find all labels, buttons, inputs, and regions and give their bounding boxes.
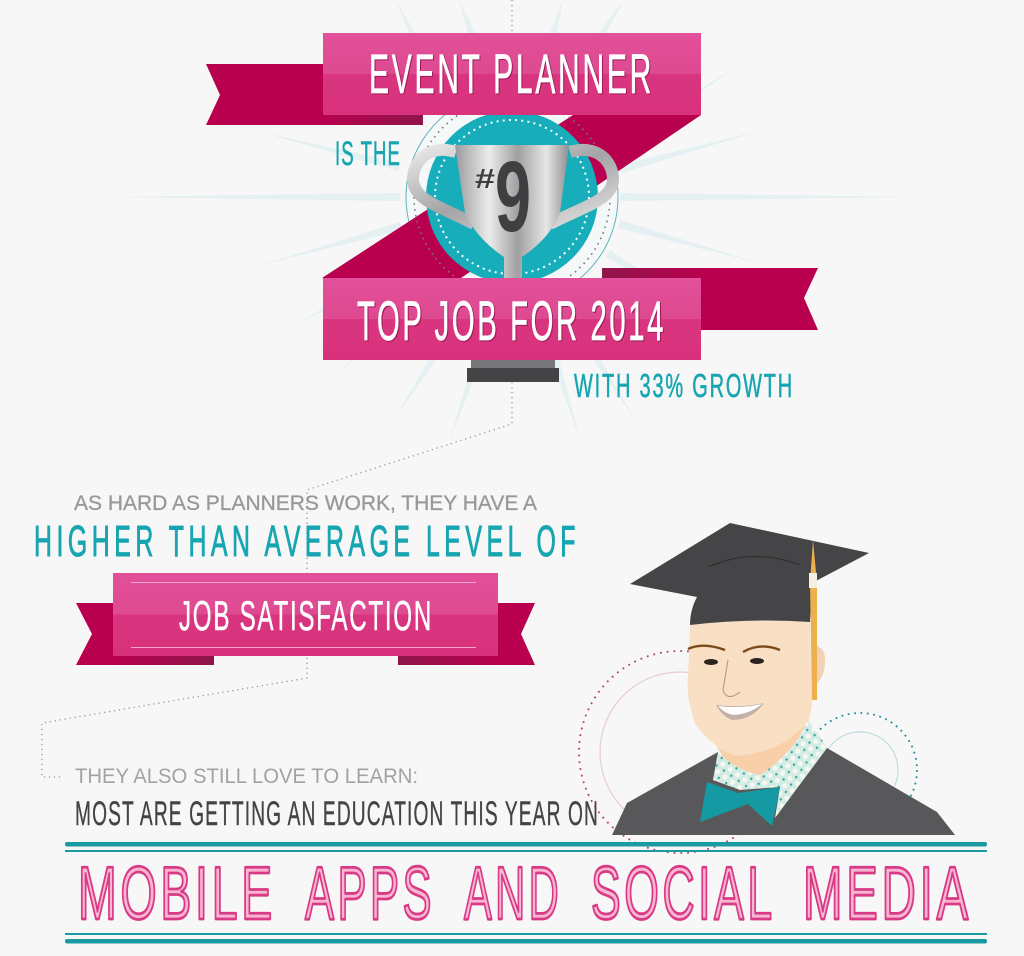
heading: TOP JOB FOR 2014: [357, 289, 666, 352]
headline: mobile apps and social media: MOBILE: [78, 851, 276, 935]
headline: mobile apps and social media: AND: [464, 851, 562, 935]
neck: [716, 722, 806, 795]
bottom rule: [131, 647, 476, 648]
cap arc: [708, 556, 800, 567]
headline: mobile apps and social media: SOCIAL: [591, 851, 774, 935]
sunburst rays: [110, 0, 917, 440]
trophy number: #: [475, 163, 496, 194]
label: JOB SATISFACTION: [179, 592, 433, 639]
ribbon tail: [206, 64, 423, 125]
eyebrows: [688, 646, 780, 652]
trophy handles: [413, 150, 613, 224]
headline: mobile apps and social media: APPS: [305, 851, 435, 935]
eye right: [750, 658, 764, 664]
text: as hard as planners work: AS HARD AS PLANNERS WORK, THEY HAVE A: [74, 492, 537, 515]
teal dotted circle: [803, 713, 917, 827]
tassel: [810, 540, 817, 700]
dotted connector line: [42, 0, 512, 777]
teeth: [718, 704, 762, 715]
heading: EVENT PLANNER: [369, 42, 654, 105]
left fold: [113, 656, 214, 665]
ribbon tail: [602, 268, 818, 330]
ribbon: event planner: [206, 33, 701, 125]
text: higher than average level of: HIGHER THAN AVERAGE LEVEL OF: [34, 517, 580, 566]
pink thin circle: [600, 672, 760, 832]
ear: [812, 645, 825, 686]
trophy number: 9: [495, 141, 531, 253]
eyes: [704, 659, 718, 665]
diagonal ribbon band: [322, 115, 701, 278]
text: most are getting an education: MOST ARE GETTING AN EDUCATION THIS YEAR ON: [75, 795, 599, 833]
collar: [713, 720, 827, 818]
text: they also still love to learn: THEY ALSO STILL LOVE TO LEARN:: [75, 765, 418, 788]
trophy base: [467, 360, 559, 382]
ribbon fold: [323, 115, 423, 125]
trophy number: [475, 141, 531, 253]
left tail: [76, 603, 214, 665]
outer dotted ring: [414, 99, 610, 295]
trophy emblem: [322, 91, 701, 303]
ribbon face: [113, 573, 498, 656]
inner dotted ring: [435, 120, 589, 274]
top rule: [131, 582, 476, 583]
ribbon: top job for 2014: [323, 268, 818, 360]
teal thin circle: [822, 732, 898, 808]
teal disc: [426, 111, 598, 283]
graduate illustration: [579, 523, 955, 853]
right fold: [398, 656, 498, 665]
ribbon face: [323, 33, 701, 115]
face: [688, 621, 812, 756]
ribbon: job satisfaction: [76, 573, 535, 665]
pink dotted circle: [579, 651, 781, 853]
bottom double rule: [65, 933, 987, 944]
tassel band: [809, 573, 817, 588]
bow tie: [700, 782, 780, 826]
mortarboard cap: [630, 523, 869, 625]
right tail: [398, 603, 535, 665]
text: with 33% growth: WITH 33% GROWTH: [574, 367, 794, 404]
nose: [723, 660, 740, 697]
gown: [612, 748, 955, 835]
top double rule: [65, 842, 987, 852]
text: is the: IS THE: [335, 135, 401, 173]
white ring: [406, 91, 618, 303]
ribbon fold: [602, 268, 701, 278]
lips: [716, 703, 764, 720]
ribbon face: [323, 278, 701, 360]
trophy cup: [455, 145, 569, 280]
